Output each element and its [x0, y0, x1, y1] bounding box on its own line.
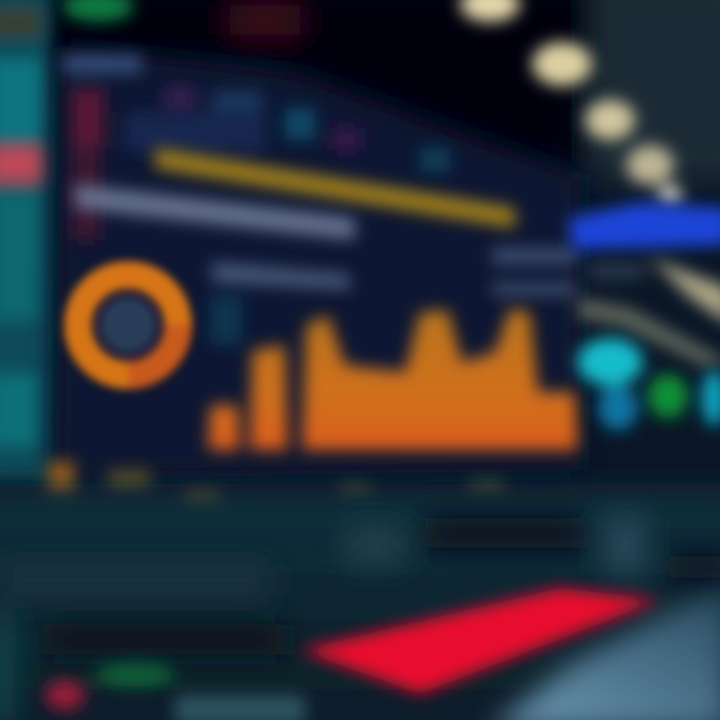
- red quadrilateral: [300, 588, 660, 694]
- light blue slab: [490, 590, 720, 720]
- floor and desks: [0, 490, 720, 720]
- footer labels: [48, 462, 504, 514]
- secondary text block: [212, 262, 350, 290]
- subheading text block: [75, 184, 355, 240]
- top left green glow: [62, 0, 134, 22]
- blue light band: [568, 202, 720, 250]
- cyan and green lights: [577, 338, 720, 430]
- donut chart: [78, 275, 178, 375]
- heading bar: [155, 148, 515, 228]
- bar chart: [208, 308, 578, 450]
- main screen panel: [48, 45, 580, 514]
- beige diagonal stripes: [578, 258, 720, 366]
- ceiling lights: [460, 0, 682, 205]
- screen colored ticker row: [62, 55, 450, 345]
- bottom left green and red glows: [45, 663, 305, 720]
- left teal wall panel: [0, 0, 52, 480]
- right text block: [492, 248, 577, 296]
- dark ceiling area: [0, 0, 720, 180]
